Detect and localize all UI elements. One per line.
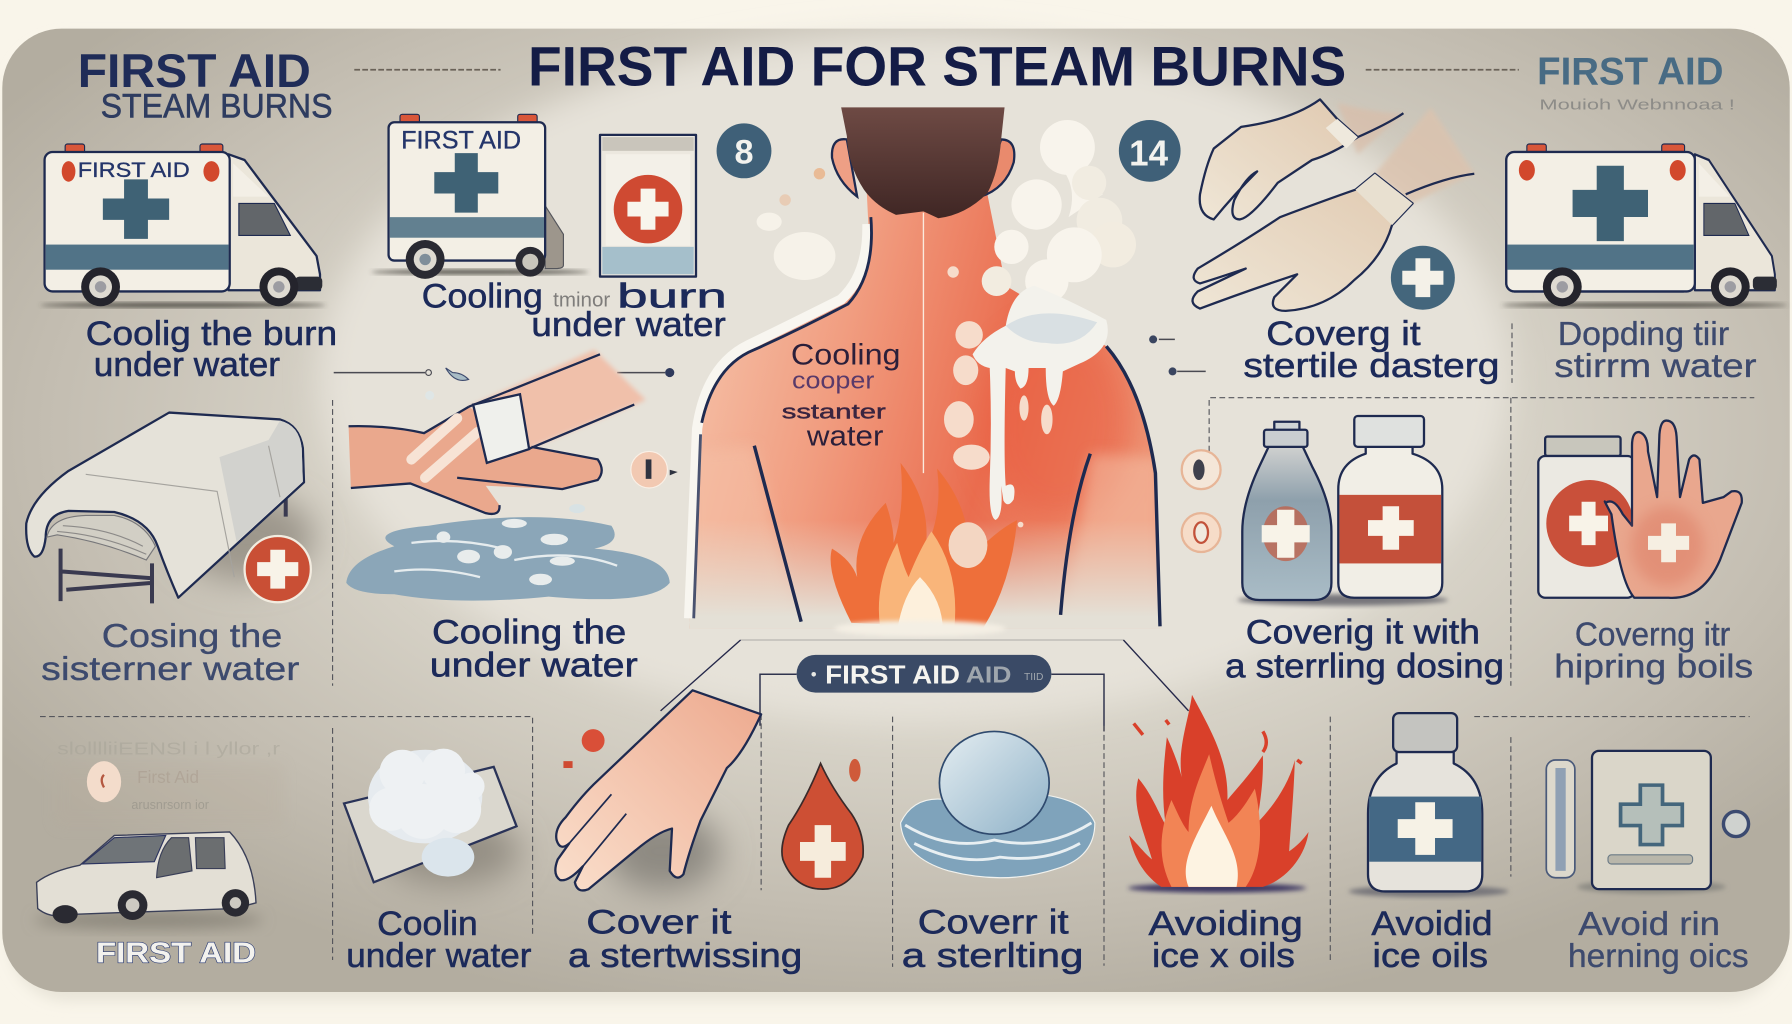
steam cloud [982, 120, 1136, 303]
label: cosing the sisterner water: sisterner water [41, 651, 299, 688]
label: cosing the sisterner water [41, 618, 299, 688]
heading: top left: STEAM BURNS [101, 88, 333, 126]
icon: van [34, 832, 263, 929]
label: covering it sterile dressing: Coverg it [1266, 315, 1421, 353]
icon: ambulance left: FIRST AID [78, 157, 190, 182]
label: cooling minor burn: burn [617, 277, 727, 315]
label: cover it sterling [902, 904, 1083, 975]
label: covering it with a sterile dressing: Coverig it with [1246, 613, 1480, 651]
label: cooling under water bottom: Coolin [377, 905, 478, 943]
hair [841, 107, 1005, 218]
back label: sstanter [782, 400, 886, 423]
burn blisters [944, 266, 1053, 568]
icon: gloved hands [1193, 99, 1474, 311]
label: cooling the burn: Coolig the burn [86, 315, 337, 353]
icon: jar and hand [1538, 421, 1742, 598]
label: doping stirrm water: stirrm water [1554, 348, 1757, 385]
label: avoiding ice and oils: ice x oils [1152, 937, 1295, 975]
label: doping stirrm water [1554, 316, 1757, 385]
label: covering it sterile dressing [1243, 315, 1499, 385]
label: cooling minor burn: Cooling [422, 277, 543, 315]
connector: left lines [334, 368, 674, 400]
icon: ambulance rear [371, 114, 589, 279]
label: avoid burning oils: Avoid rin [1578, 906, 1720, 943]
icon: gauze and cotton [344, 749, 520, 886]
back label: Cooling [791, 339, 901, 372]
label: first aid bottom: FIRST AID [96, 937, 256, 969]
label: cooling under water bottom [346, 905, 531, 975]
back label [782, 339, 901, 453]
ears [832, 139, 857, 197]
badge: blue cross [1391, 246, 1455, 310]
pill: first aid [797, 655, 1051, 693]
badge: ghost peach [87, 761, 121, 802]
label: avoid burning oils: herning oics [1568, 938, 1749, 975]
ghost sign [55, 738, 283, 826]
label: cover it sterile dressing: Cover it [586, 904, 732, 942]
back flames [831, 463, 1017, 637]
icon: flame [1128, 695, 1309, 893]
heading: top right: FIRST AID [1537, 51, 1723, 94]
pill: first aid: AID [966, 661, 1011, 687]
icon: first aid kit [1546, 751, 1749, 894]
pill: first aid: FIRST AID [825, 659, 960, 689]
ghost sign: arusnrsorn ior [131, 798, 209, 812]
icon: ice on water [901, 731, 1095, 878]
label: cooling the burn [86, 315, 337, 384]
icon: ambulance left [40, 144, 326, 307]
label: cooling the under water: under water [430, 647, 638, 685]
label: covering it hipring boils [1554, 617, 1753, 686]
label: covering it sterile dressing: stertile dasterg [1243, 347, 1499, 385]
title: FIRST AID FOR STEAM BURNS [528, 35, 1346, 98]
label: cover it sterling: a sterlting [902, 937, 1083, 975]
label: doping stirrm water: Dopding tiir [1558, 316, 1729, 353]
icon: reaching hand [555, 690, 761, 891]
label: avoiding ice and oils: Avoiding [1149, 905, 1303, 943]
badge: number 8: 8 [734, 133, 754, 171]
bracket lines [661, 640, 1189, 731]
badge: number 8 [717, 123, 771, 178]
label: cooling the burn: under water [94, 346, 280, 384]
badge: red cross left [245, 536, 311, 602]
icon: water under hand [346, 504, 670, 601]
label: cover it sterile dressing: a stertwissing [568, 937, 802, 975]
label: avoid ice oils: ice oils [1373, 937, 1488, 975]
label: covering it with a sterile dressing: a sterrling dosing [1225, 648, 1504, 686]
body [689, 193, 1158, 629]
label: cover it sterile dressing [568, 904, 802, 975]
icon: bandaged hand [349, 350, 646, 514]
label: cooling minor burn: tminor [553, 288, 610, 311]
back label: cooper [792, 368, 874, 395]
steam puffs left [757, 168, 835, 280]
label: cooling minor burn [422, 277, 727, 344]
icon: folded towel on bench [26, 413, 314, 603]
label: avoid burning oils [1568, 906, 1749, 975]
heading: top right [1537, 51, 1735, 114]
heading: top left [78, 45, 333, 126]
heading: top left: FIRST AID [78, 45, 311, 97]
icon: ambulance rear: FIRST AID [401, 127, 521, 155]
badge: small peach left [631, 451, 678, 488]
label: cooling the under water [430, 613, 638, 685]
badge: number 14 [1119, 120, 1181, 182]
label: avoiding ice and oils [1149, 905, 1303, 975]
icon: two bottles [1238, 416, 1448, 606]
label: cover it sterling: Coverr it [918, 904, 1069, 942]
pill: first aid: TIID [1024, 672, 1043, 683]
dripping water [973, 286, 1108, 520]
label: avoid ice oils: Avoidid [1371, 905, 1493, 943]
heading: top right: Mouioh Webnnoaa ! [1539, 98, 1735, 114]
label: cosing the sisterner water: Cosing the [102, 618, 282, 655]
label: covering it hipring boils: Coverng itr [1575, 617, 1730, 654]
label: covering it with a sterile dressing [1225, 613, 1504, 686]
ghost sign: slolllliiEENSl i l yllor ,r [57, 738, 280, 758]
figure: person with steam burn [674, 107, 1177, 651]
badge: number 14: 14 [1129, 133, 1169, 174]
icon: dressing packet [600, 135, 696, 277]
icon: ambulance right [1502, 144, 1787, 307]
label: cooling under water bottom: under water [346, 937, 531, 975]
badges: peach right [1182, 450, 1221, 552]
label: cooling the under water: Cooling the [432, 613, 626, 651]
back label: water [806, 421, 884, 453]
label: avoid ice oils [1371, 905, 1493, 975]
icon: blood drop [782, 759, 863, 889]
ghost sign: First Aid [137, 767, 199, 787]
connector: right dots [1149, 335, 1206, 375]
icon: bottle [1349, 713, 1509, 897]
label: cooling minor burn: under water [531, 306, 726, 344]
label: covering it hipring boils: hipring boils [1554, 649, 1753, 686]
